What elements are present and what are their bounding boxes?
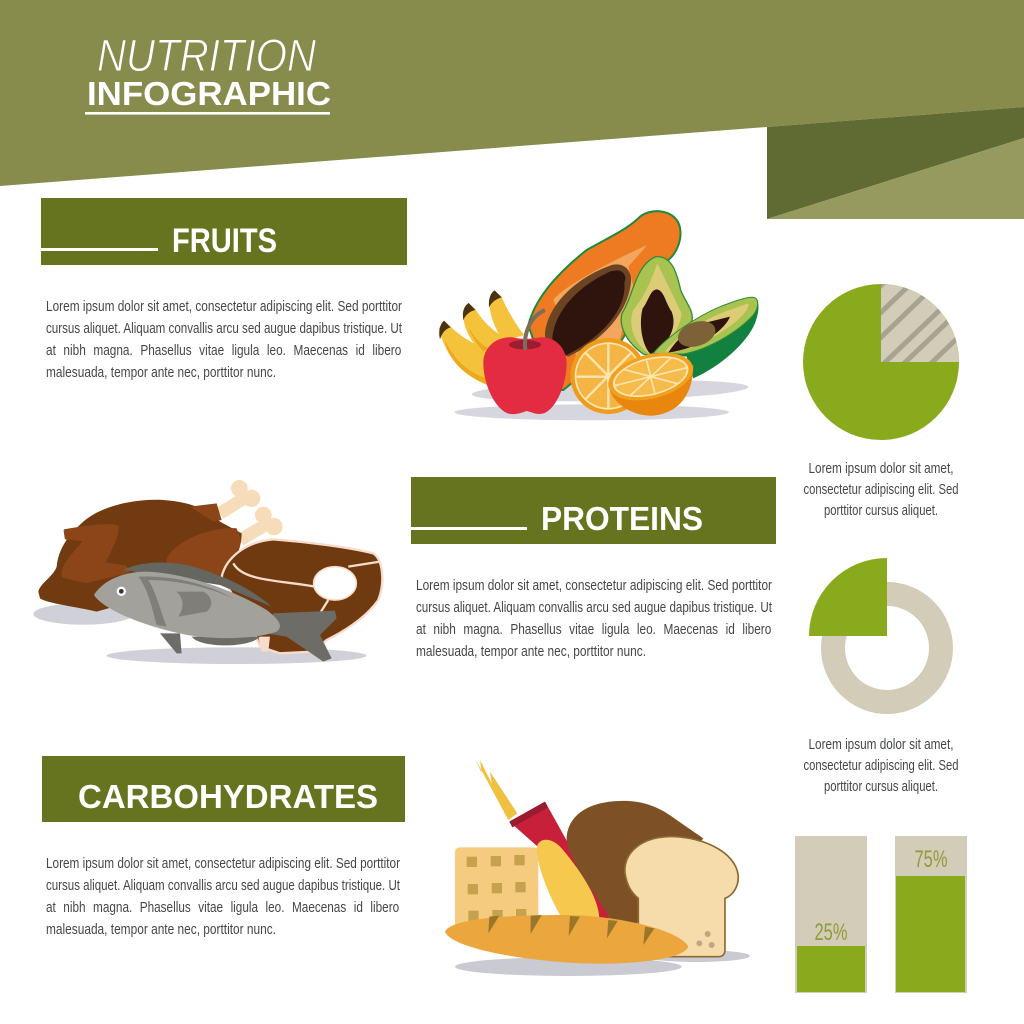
pie chart [803,284,959,440]
text block: carbohydrates [46,856,400,938]
icon: cracker [455,847,538,927]
text block: proteins: Lorem ipsum dolor sit amet, consectetur adipiscing elit. Sed porttitor [416,578,772,594]
icon: upright avocado [621,257,692,357]
text block: fruits: at nibh magna. Phasellus vitae ligula leo. Maecenas id libero [46,342,401,358]
text block: proteins: cursus aliquet. Aliquam convallis arcu sed augue dapibus tristique. Ut [416,600,772,616]
icon: spaghetti package [475,758,610,918]
caption: pie chart: Lorem ipsum dolor sit amet, [808,461,954,477]
header banner [0,0,1024,219]
text block: proteins [416,578,772,660]
icon: bread loaf [567,801,738,957]
text block: carbohydrates: Lorem ipsum dolor sit amet, consectetur adipiscing elit. Sed porttitor [46,856,400,872]
caption: pie chart: porttitor cursus aliquet. [824,503,938,519]
heading: fruits: FRUITS [172,222,277,260]
icon: orange half [603,345,698,416]
icon: baguette [445,915,688,964]
illustration: proteins [33,480,382,664]
bar: 75 percent: 75% [914,846,948,873]
title: NUTRITION [97,30,316,81]
text block: proteins: malesuada, tempor ante nec, porttitor nunc. [416,644,646,660]
heading: proteins [411,477,776,544]
icon: halved avocado [653,297,759,378]
title: INFOGRAPHIC [87,75,331,112]
caption: pie chart: consectetur adipiscing elit. Sed [804,482,958,498]
text block: carbohydrates: cursus aliquet. Aliquam convallis arcu sed augue dapibus tristique. Ut [46,878,400,894]
text block: fruits: Lorem ipsum dolor sit amet, consectetur adipiscing elit. Sed porttitor [46,299,402,315]
caption: donut chart: Lorem ipsum dolor sit amet, [808,737,954,753]
caption: donut chart: porttitor cursus aliquet. [824,779,938,795]
text block: proteins: at nibh magna. Phasellus vitae ligula leo. Maecenas id libero [416,621,771,637]
caption: pie chart [804,461,958,519]
bar: 75 percent [895,836,967,993]
icon: papaya [528,211,680,390]
text block: carbohydrates: at nibh magna. Phasellus vitae ligula leo. Maecenas id libero [46,899,399,915]
text block: fruits: cursus aliquet. Aliquam convallis arcu sed augue dapibus tristique. Ut [46,321,402,337]
heading: proteins: PROTEINS [541,500,703,537]
text block: fruits [46,299,402,381]
icon: roast chicken [38,500,242,612]
text block: carbohydrates: malesuada, tempor ante nec, porttitor nunc. [46,922,276,938]
icon: fish [94,563,337,662]
icon: apple [483,310,567,414]
icon: bananas [439,290,524,385]
title [85,30,331,115]
bar: 25 percent [795,836,867,993]
text block: fruits: malesuada, tempor ante nec, porttitor nunc. [46,365,276,381]
icon: chicken bones [220,480,283,540]
bar: 25 percent: 25% [814,919,848,946]
heading: carbohydrates [42,756,405,822]
illustration: carbohydrates [445,758,750,976]
caption: donut chart [804,737,958,795]
icon: steak [222,539,382,653]
icon: corn [537,840,599,918]
heading: carbohydrates: CARBOHYDRATES [78,778,378,815]
caption: donut chart: consectetur adipiscing elit. Sed [804,758,958,774]
icon: orange slice [570,338,646,414]
donut chart [809,558,941,702]
illustration: fruits [439,211,759,420]
heading: fruits [41,198,407,265]
